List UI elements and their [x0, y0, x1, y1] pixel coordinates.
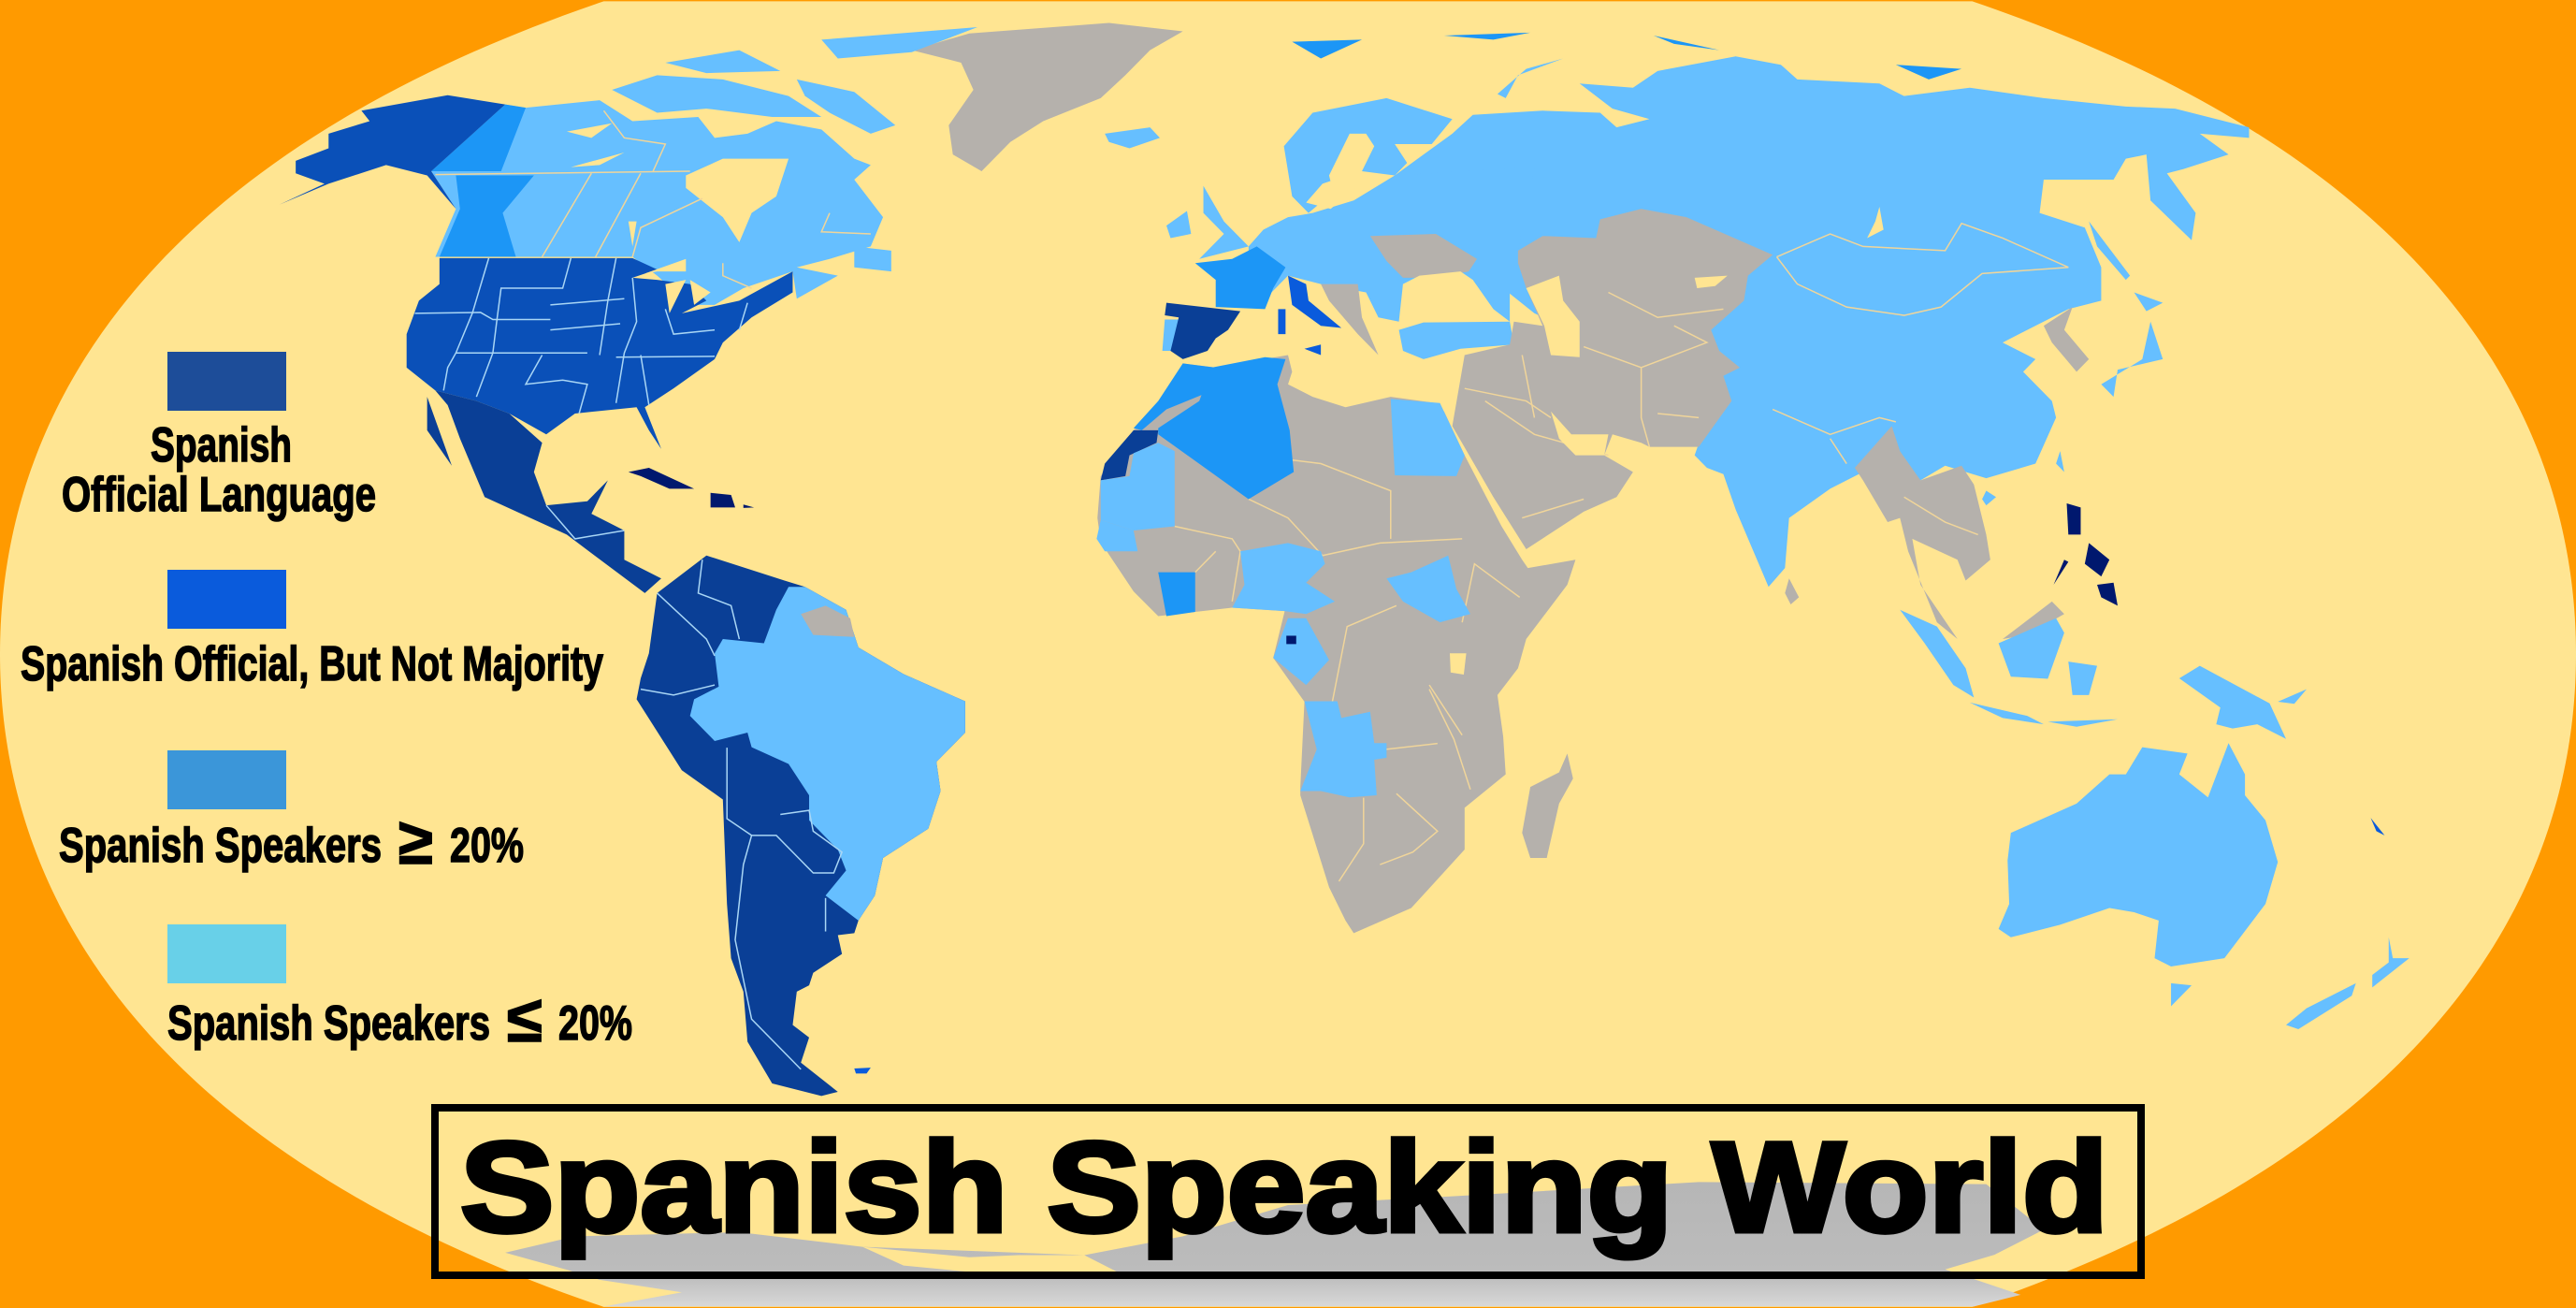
Alaska [280, 95, 505, 209]
Mongolia border [1777, 224, 2068, 315]
Caspian Sea [1527, 276, 1580, 357]
Nigeria and Cameroon [1232, 543, 1335, 614]
Madagascar [1522, 753, 1573, 858]
Western Sahara [1101, 430, 1158, 480]
Lesser Sunda Islands [2048, 719, 2118, 727]
Brazil [690, 587, 965, 921]
Hudson Bay [686, 159, 789, 242]
Egypt [1391, 399, 1465, 476]
Persian Gulf [1551, 412, 1608, 456]
Southeast Asia [1855, 426, 1990, 639]
Aral Sea [1695, 276, 1728, 288]
Lake Baikal [1867, 207, 1884, 238]
Sri Lanka [1785, 578, 1799, 604]
Middle East and Central Asia [1453, 209, 1773, 549]
United States [407, 258, 792, 449]
legend: speakers at least 20 percent: 20% [450, 819, 524, 873]
France [1195, 246, 1285, 309]
Scandinavia [1284, 98, 1453, 213]
South America [637, 556, 965, 1096]
Lake Victoria [1450, 653, 1467, 675]
Taiwan [2056, 451, 2064, 472]
legend: speakers under 20 percent: Spanish Speakers [167, 996, 490, 1051]
Falklands [854, 1068, 871, 1073]
Caribbean [629, 468, 754, 508]
Philippines [2053, 503, 2118, 605]
Canada [431, 27, 977, 305]
legend: official not majority [21, 570, 603, 691]
New Caledonia [2370, 818, 2384, 836]
Italy [1288, 276, 1341, 327]
Malaysia Borneo [2003, 602, 2064, 639]
Senegal [1096, 520, 1137, 551]
legend: official language: Spanish [151, 418, 292, 472]
Korea [2044, 307, 2089, 371]
Ireland and Britain [1166, 186, 1249, 259]
Sardinia [1278, 309, 1285, 334]
Sumatra [1900, 610, 1974, 698]
legend: speakers at least 20 percent: Spanish Speakers [59, 819, 382, 873]
legend: speakers at least 20 percent: ≥ [398, 805, 433, 878]
legend: official not majority: Spanish Official, But Not Majority [21, 637, 603, 691]
Morocco [1134, 363, 1216, 430]
legend [21, 352, 632, 1055]
Ukraine [1370, 234, 1477, 278]
Spain [1165, 303, 1240, 359]
Equatorial Guinea [1286, 635, 1296, 644]
legend: official language: Official Language [62, 468, 376, 522]
South Sudan [1386, 556, 1470, 622]
Europe [1249, 167, 1534, 322]
Russia China India [1395, 56, 2249, 587]
Hainan [1982, 491, 1996, 505]
Antarctica [505, 1182, 2044, 1306]
Sakhalin [2089, 222, 2130, 280]
legend: speakers at least 20 percent [59, 750, 524, 878]
Tasmania [2171, 983, 2192, 1006]
Iceland [1105, 127, 1160, 148]
legend: speakers under 20 percent [167, 924, 632, 1055]
Africa [1096, 355, 1575, 933]
Mauritania [1101, 443, 1175, 530]
Mexico and Central America [427, 390, 661, 593]
Greenland [912, 23, 1183, 171]
Angola [1300, 702, 1386, 797]
Ivory Coast [1158, 573, 1195, 616]
Balkans [1321, 284, 1379, 355]
Arctic islands [1292, 33, 1961, 98]
Eurasia [1195, 33, 2410, 1029]
legend: speakers under 20 percent: ≤ [507, 982, 543, 1055]
Australia [1999, 743, 2278, 966]
Black Sea [1403, 271, 1494, 322]
New Guinea [2179, 666, 2286, 739]
legend: speakers under 20 percent: 20% [558, 996, 632, 1051]
Algeria [1158, 357, 1294, 499]
Sulawesi [2068, 661, 2097, 695]
Gabon [1273, 618, 1329, 685]
Guianas [801, 605, 854, 637]
British Columbia [440, 176, 534, 257]
small islands [2278, 690, 2307, 704]
Portugal [1163, 320, 1181, 351]
title: Spanish Speaking World [460, 1116, 2108, 1259]
New Zealand [2286, 937, 2410, 1029]
Borneo [1999, 618, 2064, 678]
legend: official language [62, 352, 376, 522]
Turkey [1399, 322, 1514, 359]
Java [1970, 703, 2044, 724]
Japan [2101, 293, 2163, 397]
Baltic Sea [1306, 176, 1355, 209]
Yukon [431, 105, 526, 171]
